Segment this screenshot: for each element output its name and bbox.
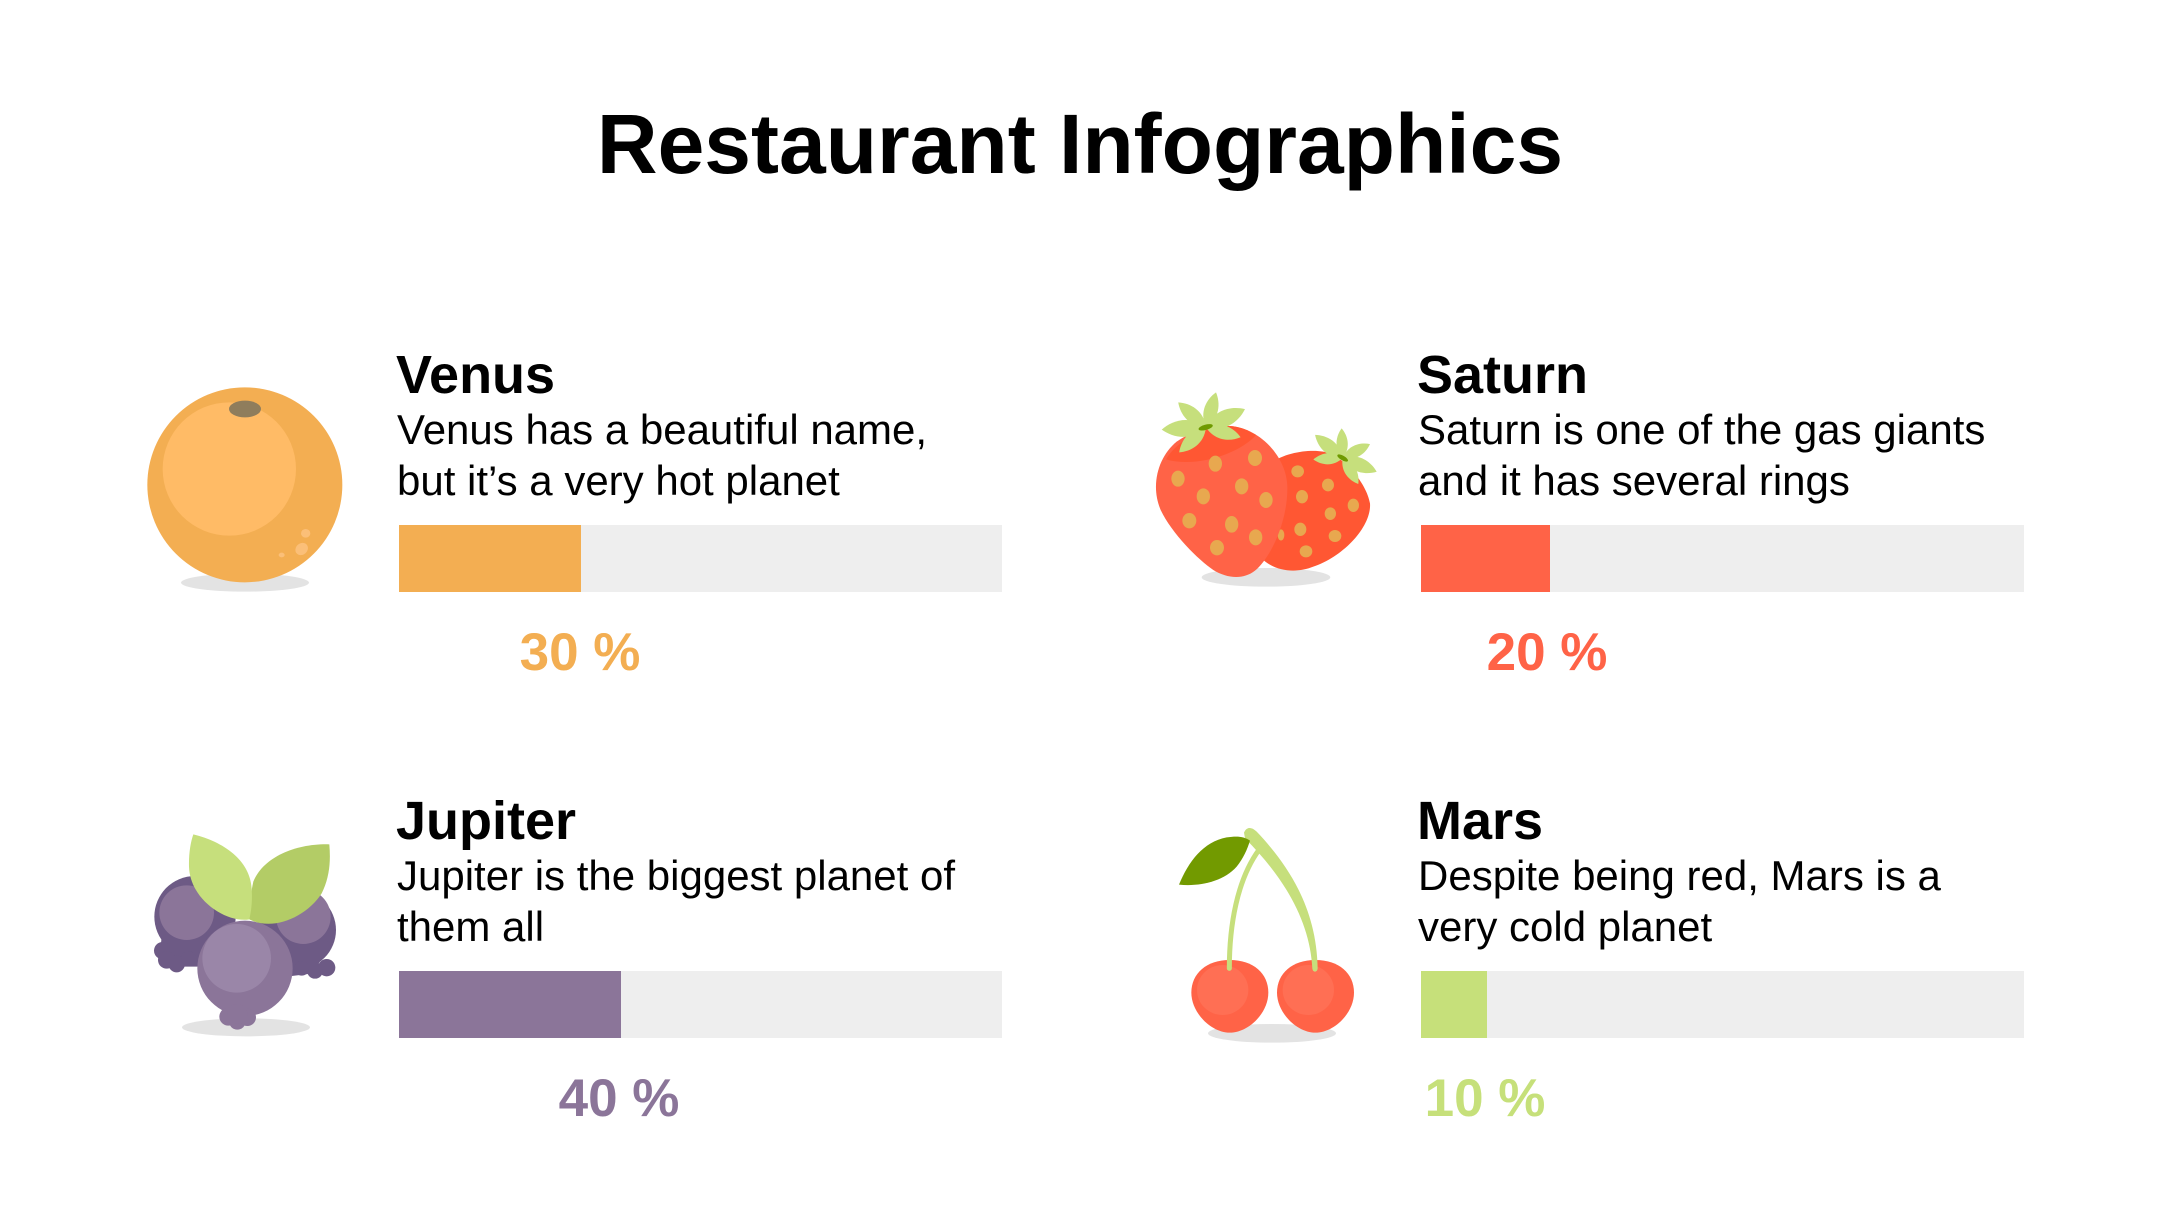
text: Saturn description: and it has several rings [1418, 457, 1850, 504]
text: Mars description: Despite being red, Mars is a [1418, 852, 1942, 899]
icon: orange [147, 387, 342, 592]
panel: Jupiter [154, 791, 1002, 1128]
panel: Saturn [1156, 345, 2024, 682]
icon: blueberries [154, 834, 336, 1036]
value: 30 %: 30 % [520, 623, 640, 682]
icon: cherries [1179, 828, 1354, 1043]
panel: Mars [1179, 791, 2024, 1128]
text: Venus description: Venus has a beautiful name, [397, 406, 927, 453]
progress bar: Mars 10% [1421, 971, 2024, 1038]
text: Venus description: but it’s a very hot planet [397, 457, 840, 504]
value: 20 %: 20 % [1487, 623, 1607, 682]
heading: Venus: Venus [396, 345, 555, 405]
text: Jupiter description: them all [397, 903, 544, 950]
progress bar: Jupiter 40% [399, 971, 1002, 1038]
heading: Saturn: Saturn [1417, 345, 1588, 405]
progress bar: Venus 30% [399, 525, 1002, 592]
heading: Jupiter: Jupiter [396, 791, 576, 851]
value: 40 %: 40 % [559, 1069, 679, 1128]
title: Restaurant Infographics [597, 97, 1563, 191]
heading: Mars: Mars [1417, 791, 1543, 851]
progress bar: Saturn 20% [1421, 525, 2024, 592]
text: Jupiter description: Jupiter is the biggest planet of [397, 852, 955, 899]
value: 10 %: 10 % [1425, 1069, 1545, 1128]
panel: Venus [147, 345, 1002, 682]
icon: strawberries [1156, 391, 1379, 587]
text: Saturn description: Saturn is one of the gas giants [1418, 406, 1985, 453]
text: Mars description: very cold planet [1418, 903, 1712, 950]
